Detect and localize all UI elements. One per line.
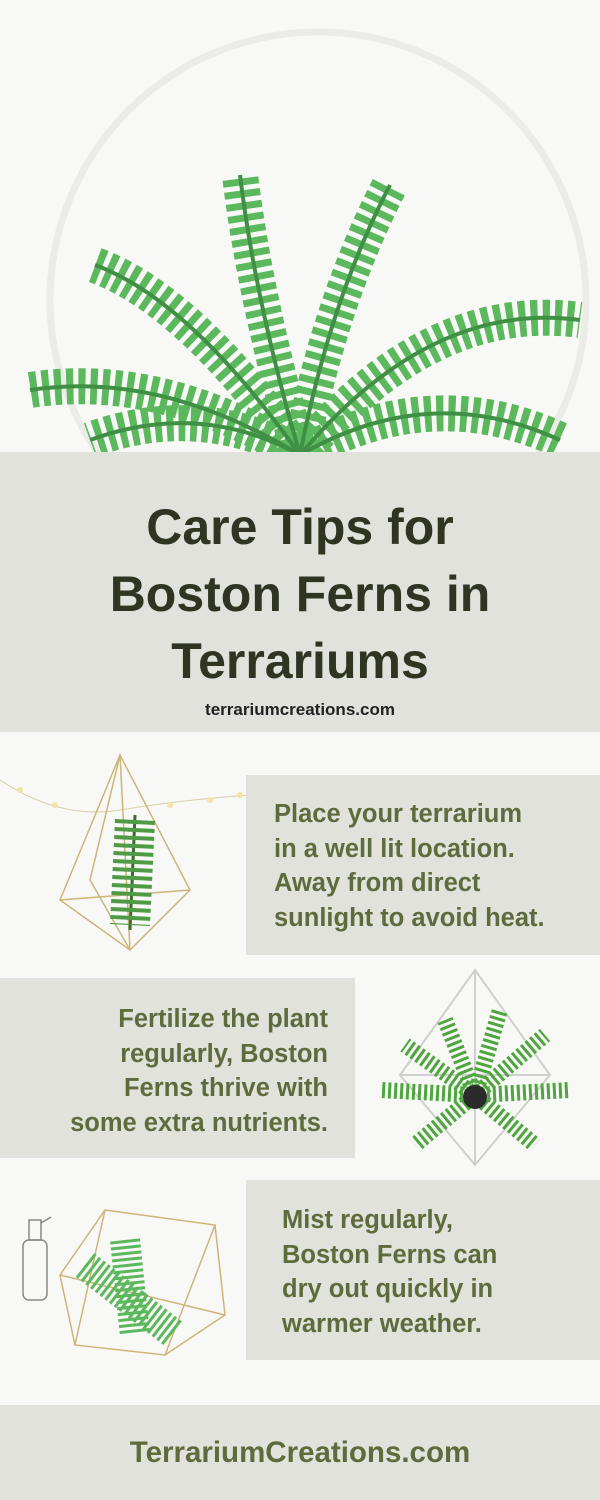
panel 1: light tip: Away from direct [274, 869, 480, 897]
panel 3: misting tip: dry out quickly in [282, 1275, 493, 1303]
panel 1: light tip: in a well lit location. [274, 834, 515, 862]
subtitle url: terrariumcreations.com [205, 700, 395, 719]
panel 1: light tip: sunlight to avoid heat. [274, 904, 545, 932]
panel 2 icon: hanging terrarium with fern [382, 968, 568, 1166]
panel 3: misting tip: Boston Ferns can [282, 1240, 497, 1268]
panel 2: fertilize tip [0, 978, 355, 1158]
footer band [0, 1405, 600, 1500]
panel 3: misting tip [246, 1180, 600, 1360]
globe outline [50, 32, 586, 568]
title band [0, 452, 600, 732]
title: Care Tips for [146, 499, 454, 555]
panel 2: fertilize tip: Fertilize the plant [118, 1005, 328, 1033]
panel 3 icon: spray bottle and geometric terrarium [22, 1209, 226, 1356]
hero illustration: fern in globe [28, 28, 590, 452]
panel 1: light tip [246, 775, 600, 955]
panel 2: fertilize tip: Ferns thrive with [124, 1074, 328, 1102]
title: Boston Ferns in [110, 566, 490, 622]
panel 2: fertilize tip: regularly, Boston [120, 1040, 328, 1068]
footer band: TerrariumCreations.com [130, 1436, 470, 1469]
panel 1: light tip: Place your terrarium [274, 800, 522, 828]
panel 2: fertilize tip: some extra nutrients. [70, 1108, 328, 1136]
title [110, 499, 490, 689]
panel 1 icon: geometric terrarium with fern and lights [0, 753, 246, 951]
panel 3: misting tip: warmer weather. [282, 1310, 482, 1338]
panel 3: misting tip: Mist regularly, [282, 1206, 453, 1234]
title: Terrariums [171, 633, 429, 689]
